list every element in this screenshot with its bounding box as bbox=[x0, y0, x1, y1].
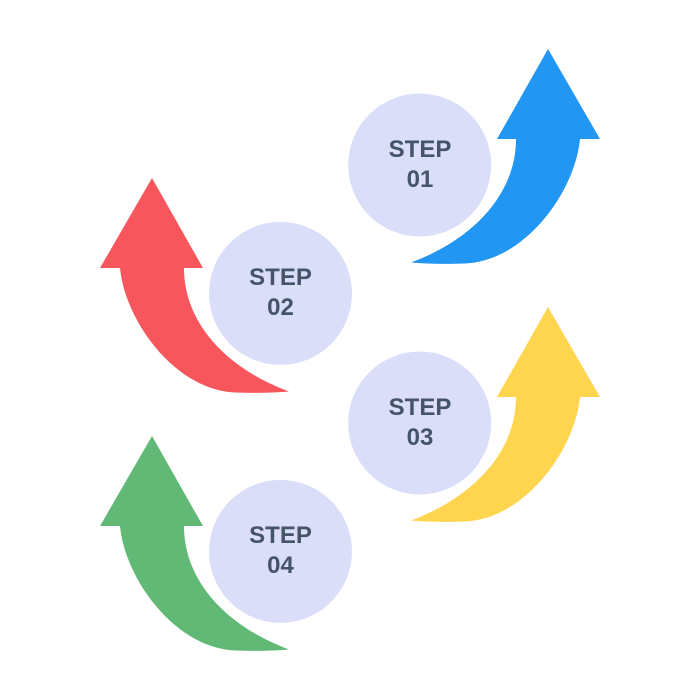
step 02 label: STEP bbox=[249, 264, 312, 291]
arrow: green, step 04 bbox=[100, 436, 289, 651]
step 01 label: STEP bbox=[389, 136, 451, 163]
step 02 label: 02 bbox=[267, 294, 294, 321]
step 04 label: STEP bbox=[249, 522, 312, 549]
step 03 circle bbox=[348, 352, 491, 494]
arrow: blue, step 01 bbox=[411, 49, 600, 264]
arrow: yellow, step 03 bbox=[411, 307, 600, 522]
step 01 label: 01 bbox=[407, 166, 433, 193]
arrow: red, step 02 bbox=[100, 178, 289, 393]
step 04 circle bbox=[209, 480, 352, 623]
step 02 circle bbox=[209, 222, 352, 365]
step 04 label: 04 bbox=[267, 552, 294, 579]
step 01 circle bbox=[348, 94, 491, 236]
step 03 label: STEP bbox=[389, 394, 451, 421]
step 03 label: 03 bbox=[407, 424, 433, 451]
